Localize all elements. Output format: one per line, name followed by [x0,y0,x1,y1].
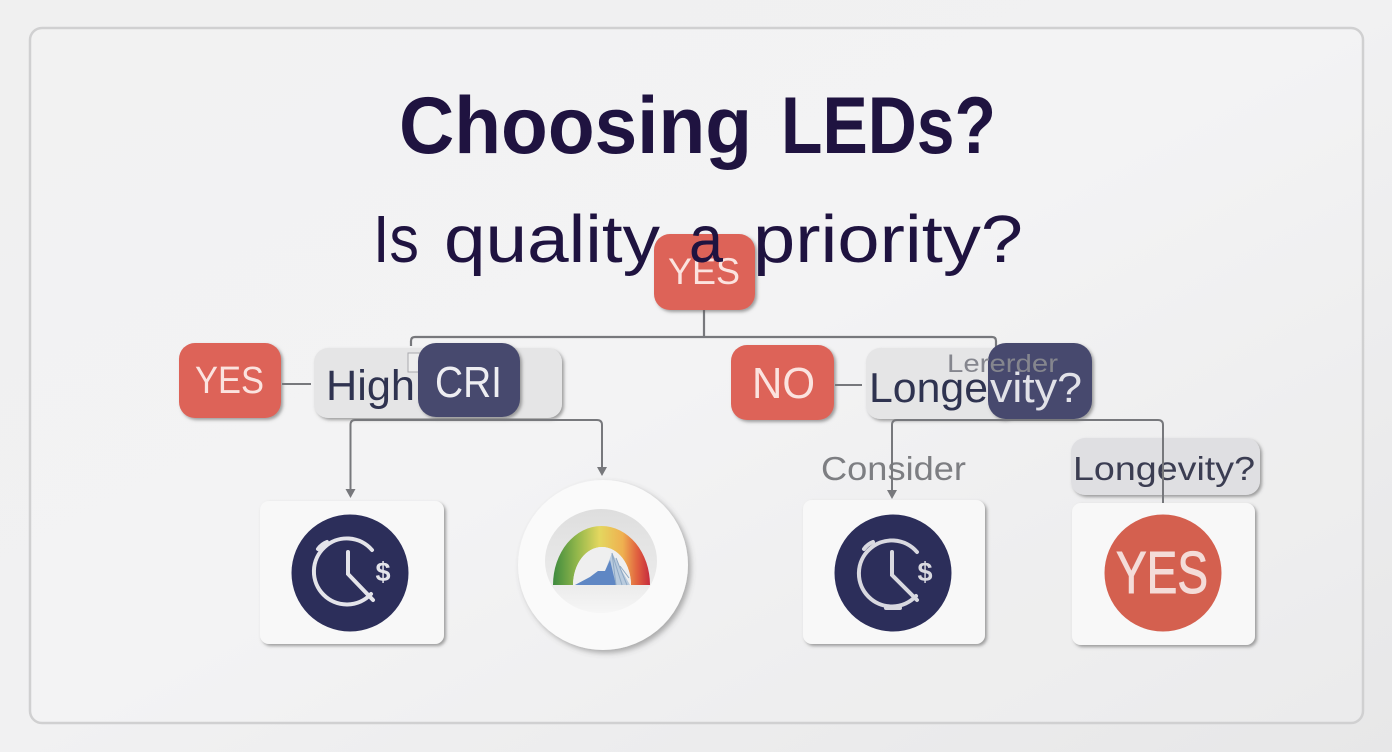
node: root YES box: YES [668,251,740,292]
title: LEDs? [781,81,996,171]
branch right: NO to Longevity [731,343,1260,503]
subtitle question [373,202,1023,277]
subtitle question: Is [373,202,419,277]
node: left YES box [179,343,281,418]
node: root YES box [654,234,755,310]
connector: top branch from root YES [411,308,996,348]
node: Longevity pill: Lererder [947,350,1058,378]
node: Longevity pill: Longe [869,364,988,411]
node: Longevity pill: vity? [990,364,1082,411]
label: Consider: Consider [821,450,966,487]
connector: High CRI to bottom cards [346,420,607,498]
node: NO box: NO [752,359,815,408]
node: High CRI pill [314,343,562,418]
connector: left YES to High CRI [282,383,311,385]
card: CRI gauge dial [518,480,688,650]
node: NO box [731,345,834,420]
node: second Longevity pill [1071,438,1260,495]
connector: NO to Longevity [835,384,862,386]
node: High CRI pill: High [326,362,415,410]
icon: YES circle [1104,514,1222,632]
node: second Longevity pill: Longevity? [1073,450,1255,487]
title: Choosing [399,81,752,171]
subtitle question: priority? [753,202,1023,277]
card: clock and cost icon, right [803,500,985,644]
card: YES result [1072,503,1255,645]
branch left: YES to High CRI [179,343,607,498]
icon: clock with dollar sign: $ [917,557,933,587]
node: High CRI pill: CRI [435,358,502,407]
icon: clock with dollar sign: $ [375,557,391,587]
icon: clock with dollar sign [292,514,408,632]
subtitle question: quality [444,202,661,277]
node: Longevity pill [866,343,1092,419]
connector: Longevity to bottom cards [887,420,1163,503]
title [399,81,996,171]
icon: clock with dollar sign [834,514,952,632]
chart: rainbow gauge [553,526,650,585]
node: left YES box: YES [195,360,264,402]
icon: YES circle: YES [1116,540,1208,606]
subtitle question: a [689,202,724,277]
card: clock and cost icon, left [260,501,444,644]
